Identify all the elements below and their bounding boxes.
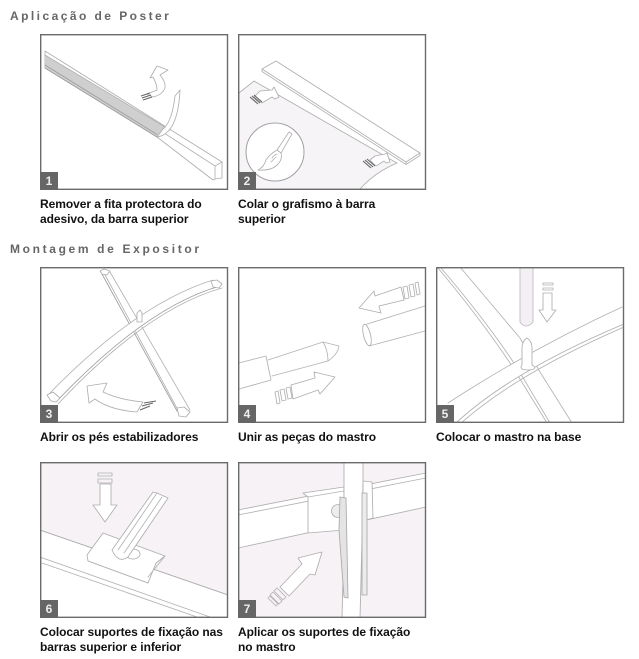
illustration: poster background and bar — [40, 462, 228, 618]
icon: arrow down — [93, 473, 117, 522]
badge: 6: 6 — [46, 602, 53, 616]
illustration: top bar with protective tape — [45, 51, 222, 180]
badge: 2: 2 — [244, 174, 251, 188]
panel: step 5 place mast on base — [436, 267, 626, 423]
badge: 1 — [40, 172, 58, 190]
badge: 7 — [238, 600, 256, 618]
heading: Montagem de Expositor: Montagem de Expositor — [10, 242, 202, 256]
icon: peeling tape curve — [157, 90, 180, 137]
illustration: mast piece with tip — [239, 342, 339, 389]
icon: curved opening arrow — [87, 383, 156, 412]
caption: step 1: adesivo, da barra superior — [40, 212, 189, 226]
caption: step 6: Colocar suportes de fixação nas — [40, 625, 223, 639]
caption: step 6: barras superior e inferior — [40, 640, 182, 654]
caption: step 7: no mastro — [238, 640, 295, 654]
panel: step 3 open stabilizer feet — [40, 268, 228, 423]
illustration: base pin — [521, 338, 535, 370]
illustration: top bar — [262, 61, 420, 164]
caption: step 2: Colar o grafismo à barra — [238, 197, 376, 211]
caption: step 5: Colocar o mastro na base — [436, 430, 582, 444]
icon: arrow down — [539, 283, 556, 322]
illustration: straight leg — [100, 269, 190, 417]
illustration: toothed strip and slot — [339, 493, 367, 598]
icon: curved up arrow — [141, 66, 168, 100]
illustration: base legs — [438, 267, 572, 423]
illustration: mast pole — [342, 462, 363, 618]
caption: step 2: superior — [238, 212, 286, 226]
badge: 5 — [436, 405, 454, 423]
icon: left arrow onto bar — [250, 87, 279, 104]
caption: step 7: Aplicar os suportes de fixação — [238, 625, 410, 639]
badge: 4: 4 — [244, 407, 251, 421]
illustration: poster sheet — [238, 81, 397, 190]
badge: 7: 7 — [244, 602, 251, 616]
illustration: bracket — [303, 481, 373, 533]
panel: step 7 attach supports to mast — [238, 462, 426, 618]
badge: 5: 5 — [442, 407, 449, 421]
panel: step 1 remove adhesive tape — [40, 35, 228, 190]
icon: brush in circle — [246, 123, 304, 181]
panel: step 4 join mast pieces — [238, 268, 426, 423]
caption: step 1: Remover a fita protectora do — [40, 197, 202, 211]
badge: 6 — [40, 600, 58, 618]
illustration: curved base band — [448, 307, 626, 423]
badge: 1: 1 — [46, 174, 53, 188]
illustration: hollow mast tube — [361, 306, 425, 347]
icon: right arrow onto bar — [363, 153, 390, 168]
badge: 3 — [40, 405, 58, 423]
illustration: fixing clip — [87, 492, 168, 583]
caption: step 3: Abrir os pés estabilizadores — [40, 430, 199, 444]
icon: diagonal arrow — [268, 552, 322, 606]
caption: step 4: Unir as peças do mastro — [238, 430, 376, 444]
panel: step 6 attach fixing supports — [40, 462, 228, 618]
illustration: mast pole — [520, 268, 533, 326]
heading: Aplicação de Poster: Aplicação de Poster — [10, 9, 171, 23]
icon: arrow left — [359, 282, 420, 313]
illustration: curved leg — [47, 280, 222, 404]
panel: step 2 glue graphic to top bar — [238, 35, 426, 190]
icon: arrow right — [275, 372, 335, 404]
illustration: background and horizontal bar — [238, 462, 426, 618]
badge: 4 — [238, 405, 256, 423]
badge: 3: 3 — [46, 407, 53, 421]
badge: 2 — [238, 172, 256, 190]
